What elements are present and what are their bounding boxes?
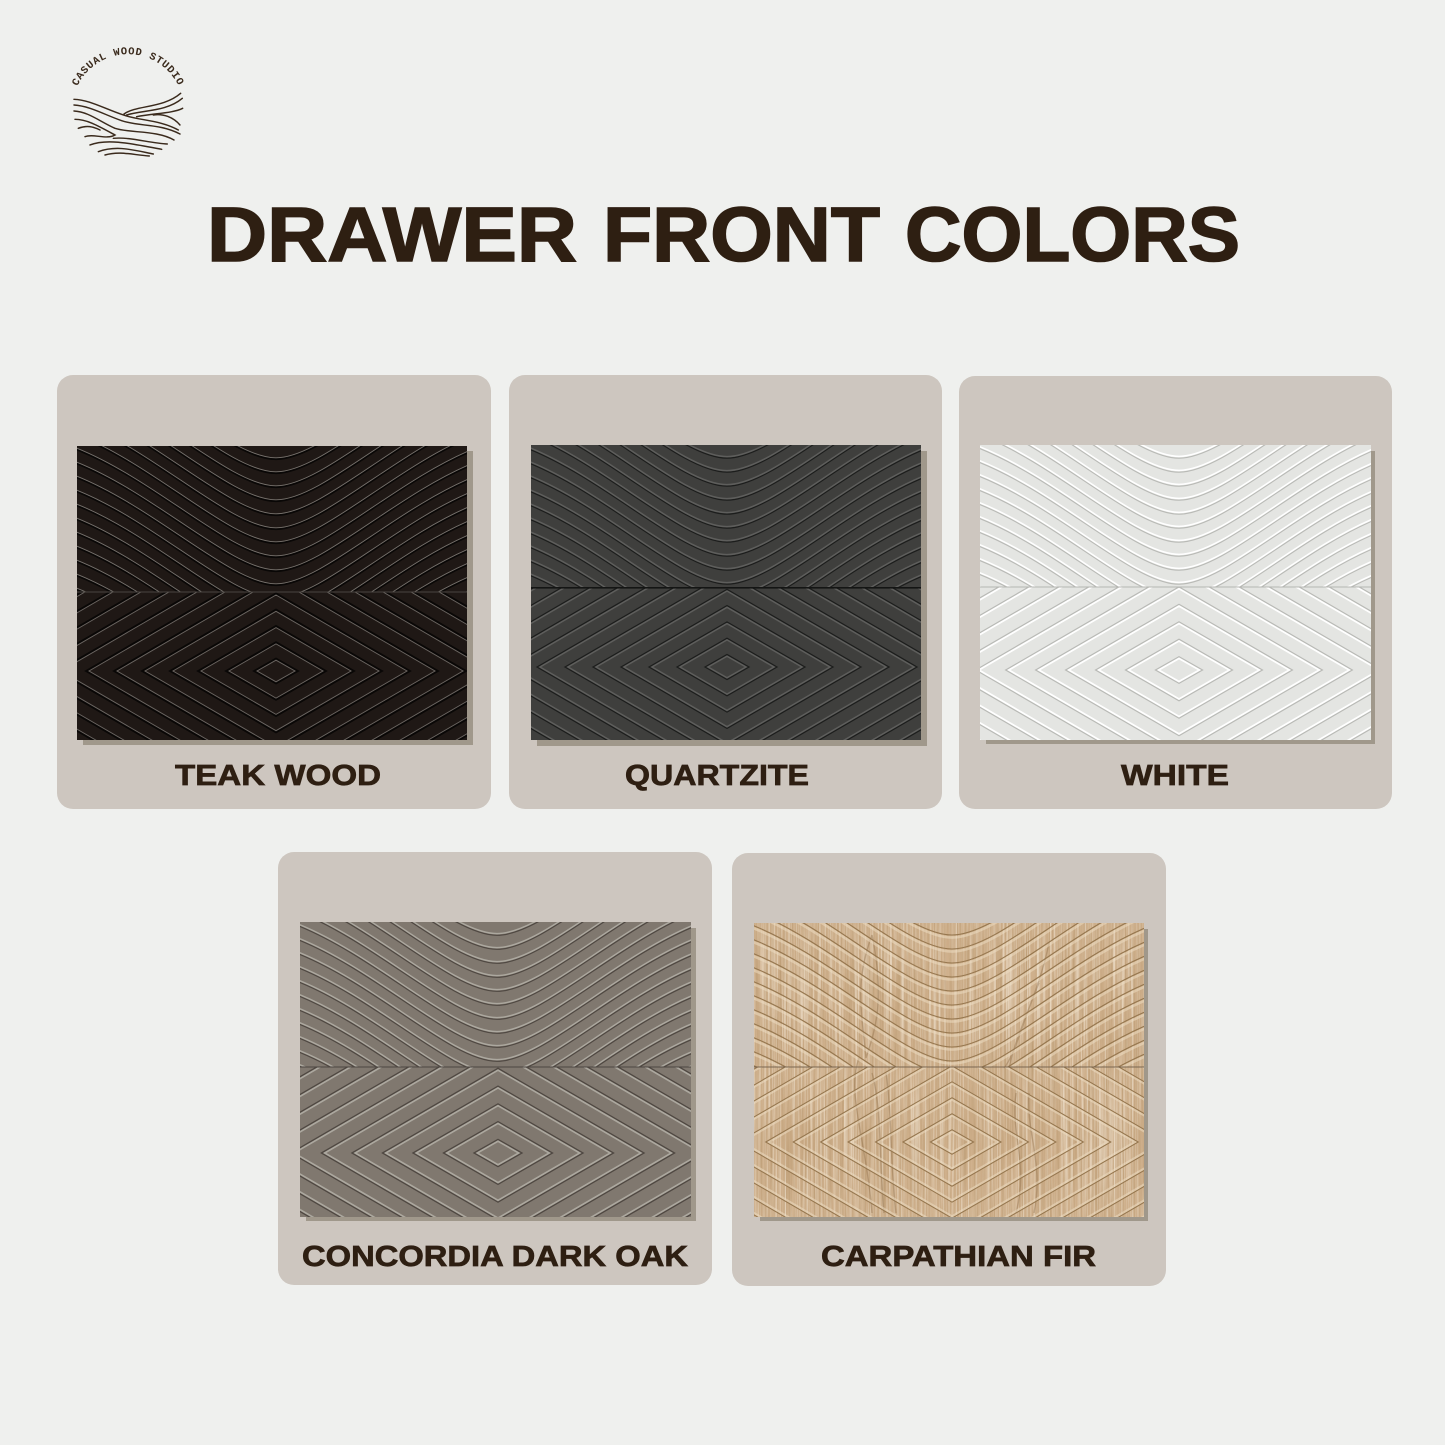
swatch shadow	[83, 451, 473, 745]
title: COLORS	[905, 192, 1240, 278]
wood knots and figure	[855, 935, 1049, 1213]
swatch shadow	[760, 929, 1148, 1221]
label: CARPATHIAN FIR	[821, 1241, 1096, 1273]
title: DRAWER	[207, 192, 577, 278]
swatch: concordia dark oak carved pattern	[108, 826, 888, 1380]
swatch: teak wood carved pattern	[0, 350, 634, 879]
swatch: carpathian fir carved wood pattern	[601, 827, 1303, 1346]
label: QUARTZITE	[625, 760, 809, 792]
logo wave lines	[74, 93, 183, 156]
title	[207, 192, 1240, 278]
swatch shadow	[537, 451, 927, 746]
panel: quartzite	[369, 349, 1085, 875]
panel: white	[796, 348, 1445, 893]
swatch shadow	[986, 451, 1375, 744]
title: FRONT	[603, 192, 880, 278]
swatch shadow	[306, 928, 696, 1221]
swatch: white carved pattern	[796, 348, 1445, 893]
label: CONCORDIA DARK OAK	[302, 1241, 688, 1273]
swatch: quartzite carved pattern	[369, 349, 1085, 875]
logo wordmark: CASUAL WOOD STUDIO	[72, 47, 184, 85]
label: TEAK WOOD	[175, 760, 381, 792]
panel: concordia dark oak	[108, 826, 888, 1380]
label: WHITE	[1121, 760, 1229, 792]
panel: carpathian fir	[601, 827, 1303, 1346]
panel: teak wood	[0, 350, 634, 879]
logo: Casual Wood Studio	[72, 47, 184, 157]
